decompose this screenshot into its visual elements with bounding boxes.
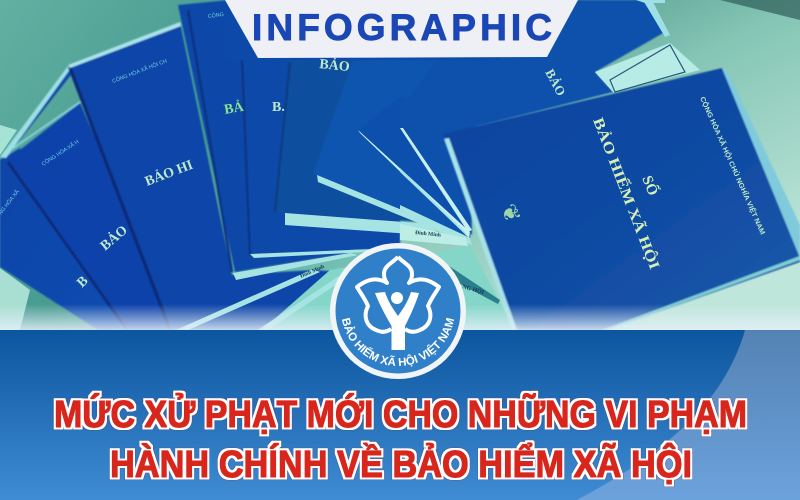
fan book titles: BẢ [223, 98, 246, 118]
main book title [495, 95, 767, 272]
fan book titles [0, 11, 569, 291]
INFOGRAPHIC banner [225, 0, 578, 58]
fan of books, left side [0, 0, 665, 330]
fan book titles: B [74, 274, 91, 291]
main title: HÀNH CHÍNH VỀ BẢO HIỂM XÃ HỘI [110, 441, 692, 486]
person figure [375, 292, 419, 350]
fan book titles: CỘNG HÒA XÃ HỘI CH [111, 57, 168, 85]
fan book titles: BẢO HI [142, 156, 195, 190]
fan book titles: B. [272, 100, 285, 115]
strip name labels: NG HỘI [461, 282, 486, 296]
bottom blue band [0, 330, 800, 500]
strip name labels: Đinh Minh [415, 230, 441, 239]
logo ring text: BẢO HIỂM XÃ HỘI VIỆT NAM [342, 318, 454, 367]
book page strips [176, 128, 515, 330]
book cover labels [0, 11, 767, 296]
fan book titles: CỘNG [207, 11, 224, 20]
main book title: ❦ [495, 200, 526, 227]
fan book titles: BẢO [542, 66, 569, 98]
strip name labels [299, 230, 486, 296]
main book title: BẢO HIỂM XÃ HỘI [589, 115, 664, 272]
photo background table [0, 0, 800, 330]
photo fade [0, 304, 800, 330]
main book title: SỔ [638, 173, 662, 198]
fan book titles: CỘNG HÒA XÃ H [40, 138, 80, 168]
strip name labels: Đinh Minh [299, 264, 325, 280]
photo: blue social insurance books [0, 0, 800, 330]
main book title: CỘNG HÒA XÃ HỘI CHỦ NGHĨA VIỆT NAM [698, 95, 767, 236]
logo: Bảo hiểm xã hội Việt Nam [330, 243, 466, 379]
lighter curved corner [577, 330, 800, 500]
main book [443, 68, 800, 330]
flower outline [357, 257, 439, 332]
paper card [595, 0, 700, 92]
main title [54, 392, 747, 486]
fan book titles: BẢO [97, 221, 131, 254]
banner heading: INFOGRAPHIC [252, 7, 552, 48]
fan book titles: BẢO [319, 55, 351, 75]
